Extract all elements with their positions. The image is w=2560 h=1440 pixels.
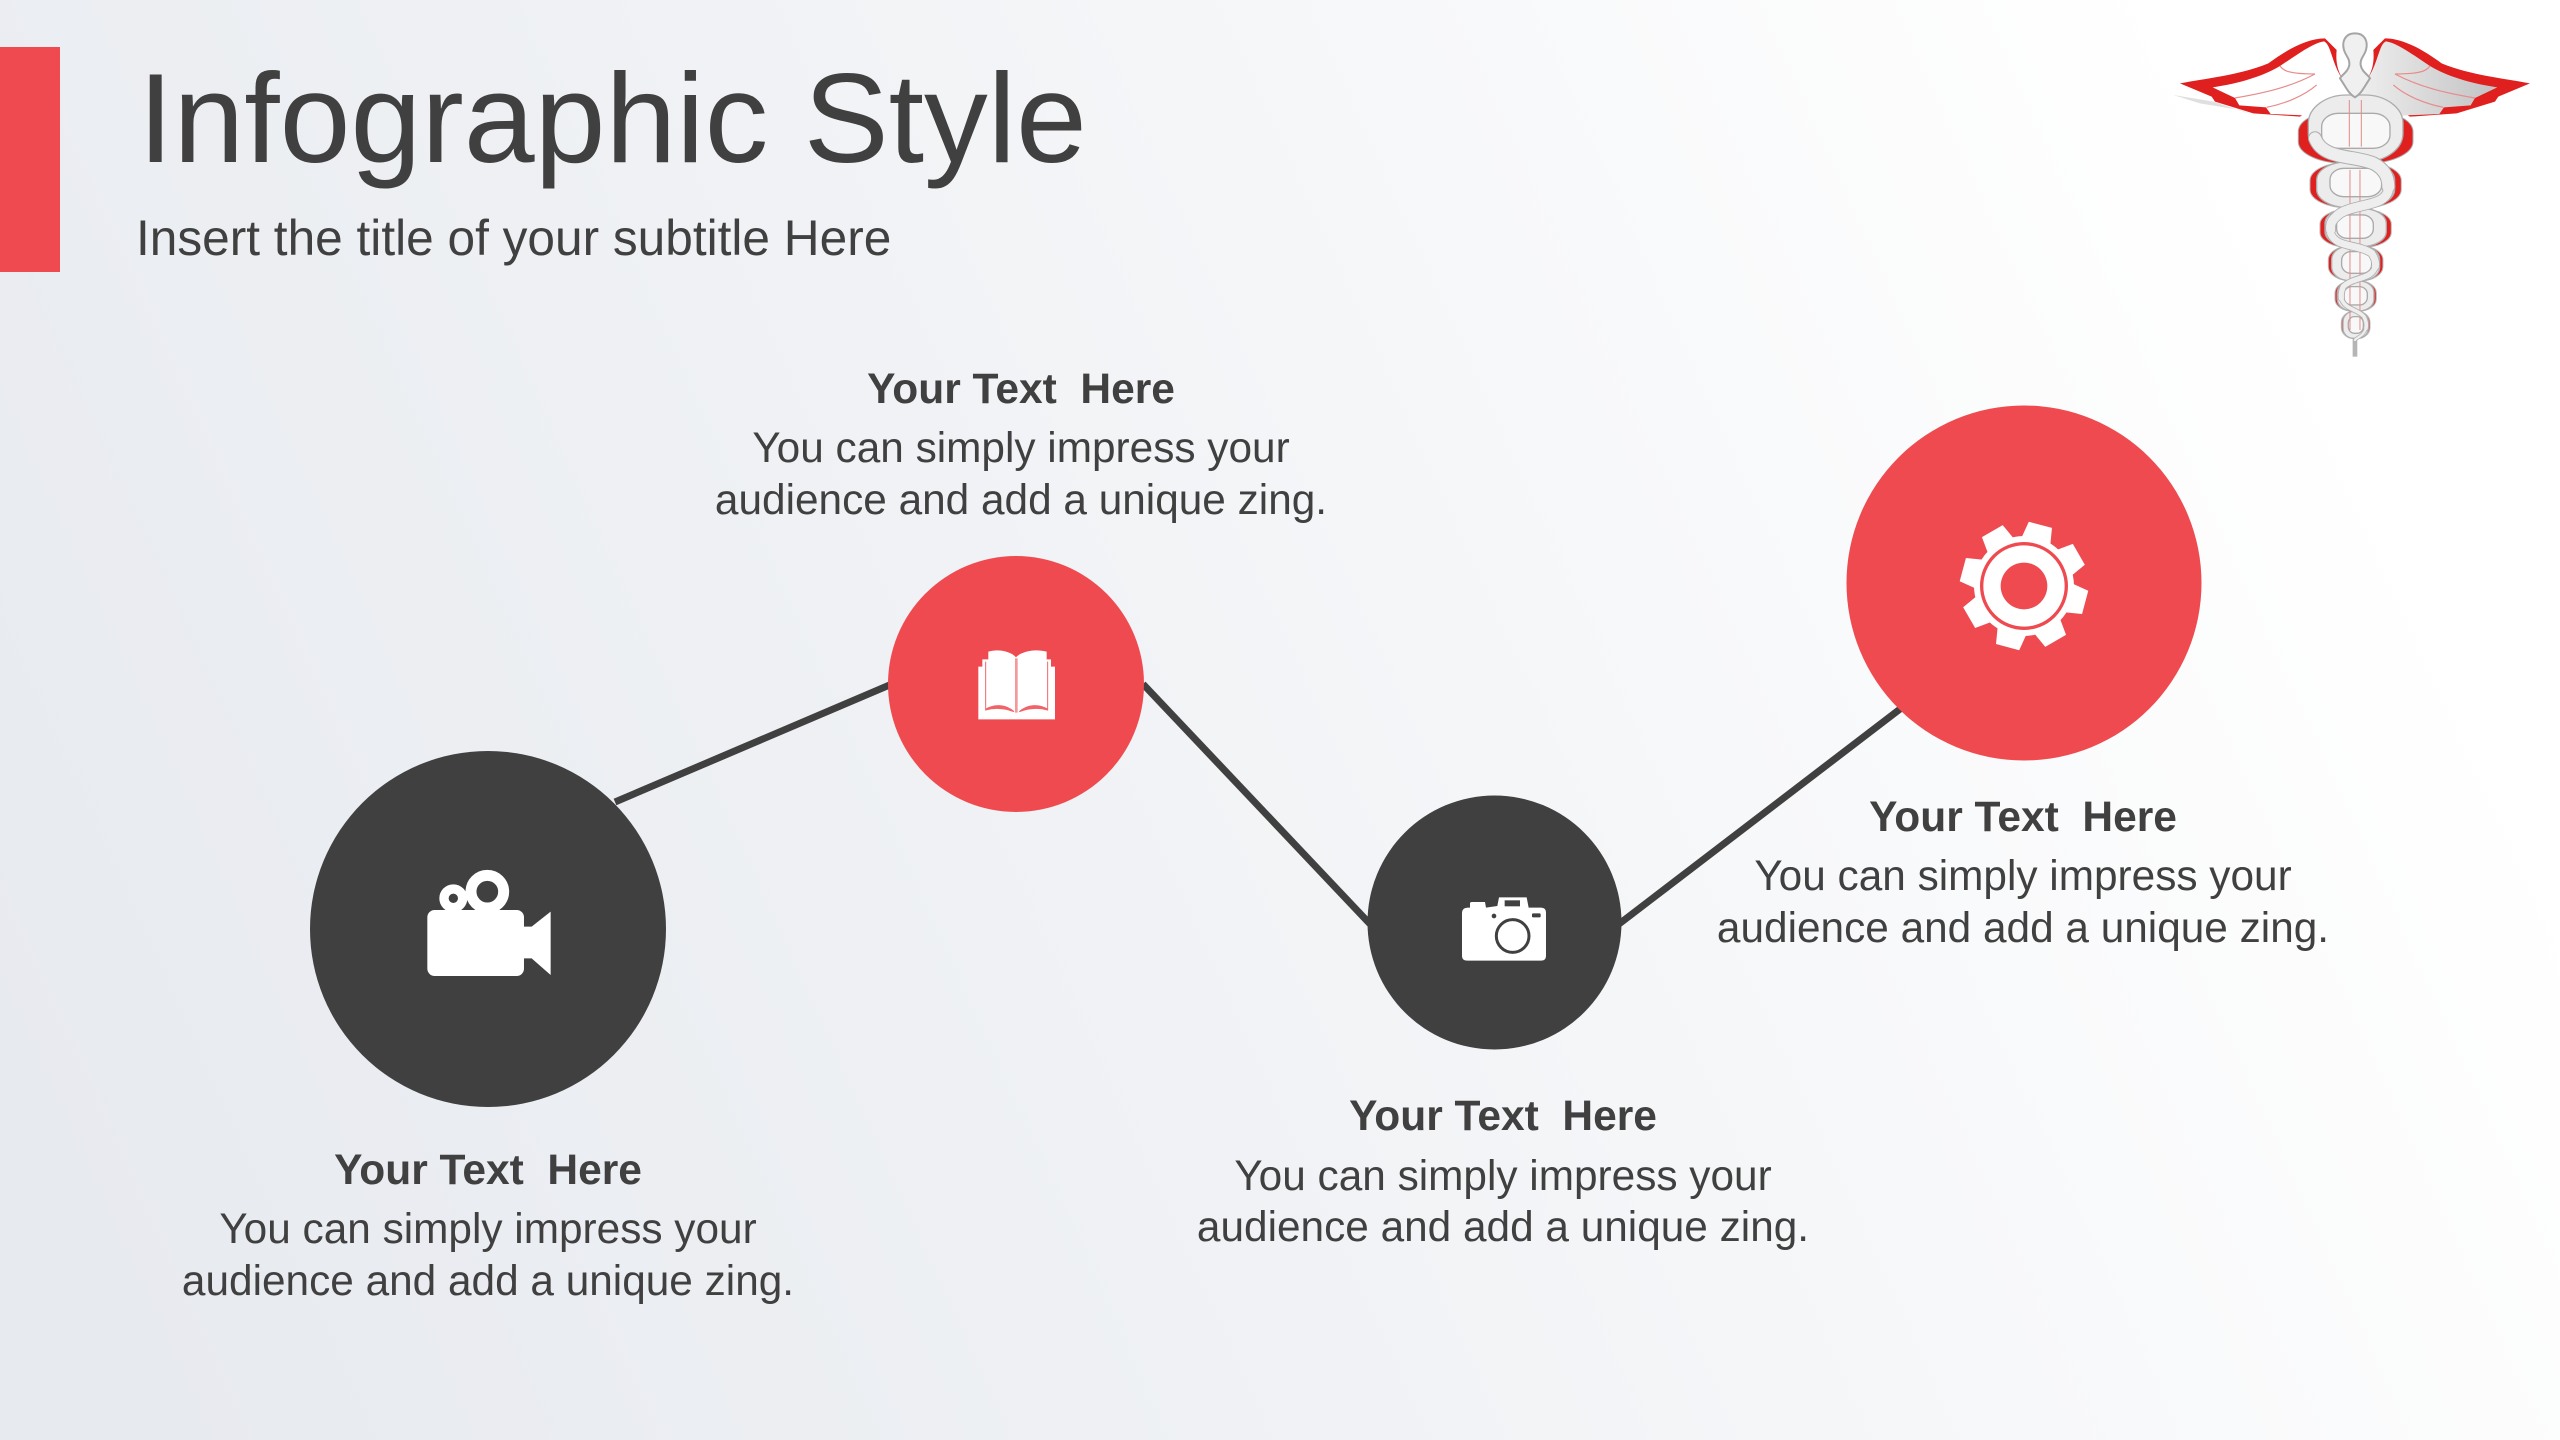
connector line 1	[615, 684, 892, 802]
icon: video camera	[427, 875, 551, 976]
text block: node 1: Your Text Here	[334, 1147, 642, 1194]
logo: caduceus	[2173, 33, 2530, 357]
icon: photo camera	[1462, 897, 1546, 961]
connector line 2	[1143, 684, 1370, 924]
connector line 3	[1619, 706, 1904, 924]
text block: node 1: You can simply impress your	[219, 1205, 757, 1252]
subtitle: Insert the title of your subtitle Here	[136, 210, 891, 266]
text block: node 1	[182, 1147, 794, 1304]
node 1: dark circle with video camera icon	[310, 751, 666, 1107]
text block: node 3: Your Text Here	[1349, 1093, 1657, 1140]
text block: node 3: You can simply impress your	[1234, 1152, 1772, 1199]
text block: node 4: You can simply impress your	[1754, 852, 2292, 899]
text block: node 3	[1197, 1093, 1809, 1250]
icon: gear	[1959, 521, 2089, 651]
red title accent bar	[0, 47, 60, 272]
text block: node 2: Your Text Here	[867, 366, 1175, 413]
text block: node 4	[1717, 794, 2329, 951]
title: Infographic Style	[138, 47, 1087, 189]
text block: node 4: audience and add a unique zing.	[1717, 904, 2329, 951]
text block: node 2: You can simply impress your	[752, 424, 1290, 471]
icon: open book	[978, 650, 1055, 719]
text block: node 2: audience and add a unique zing.	[715, 476, 1327, 523]
node 3: dark circle with photo camera icon	[1368, 796, 1622, 1050]
text block: node 1: audience and add a unique zing.	[182, 1257, 794, 1304]
text block: node 2	[715, 366, 1327, 523]
text block: node 3: audience and add a unique zing.	[1197, 1203, 1809, 1250]
node 2: red circle with book icon	[888, 556, 1144, 812]
node 4: red circle with gear icon	[1846, 406, 2202, 760]
text block: node 4: Your Text Here	[1869, 794, 2177, 841]
